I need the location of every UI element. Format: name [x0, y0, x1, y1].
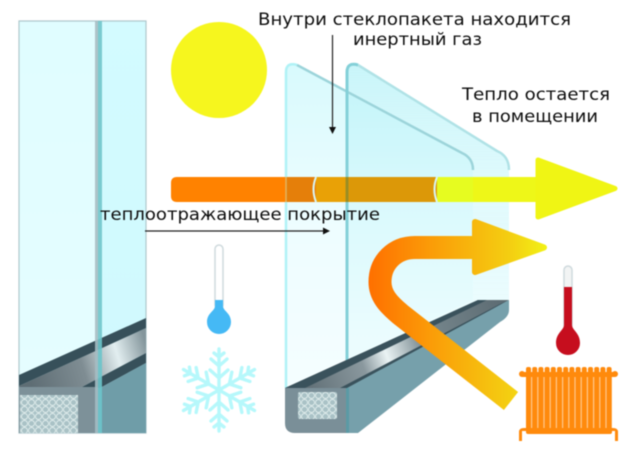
spacer side — [347, 300, 509, 433]
text: coating label: теплоотражающее покрытие — [100, 205, 380, 224]
honeycomb desiccant — [298, 392, 337, 419]
panel: left close-up of glass unit — [19, 21, 146, 433]
icon: cold thermometer — [207, 245, 231, 334]
arrow: reflected heat arrow — [380, 222, 544, 401]
icon: snowflake — [179, 349, 259, 431]
heading: inert gas label — [258, 10, 571, 49]
panel: double glazing unit — [285, 63, 509, 433]
spacer front — [285, 388, 348, 433]
honeycomb desiccant — [20, 395, 78, 433]
arrow: coating pointer — [145, 228, 330, 234]
text: heat stays indoors: в помещении — [472, 107, 598, 126]
icon: radiator — [519, 367, 618, 441]
text: heat stays indoors: Тепло остается — [461, 85, 610, 104]
icon: sun — [171, 22, 267, 118]
heading: inert gas label: инертный газ — [353, 30, 482, 49]
text: heat stays indoors — [461, 85, 610, 126]
heading: inert gas label: Внутри стеклопакета находится — [258, 10, 571, 29]
icon: hot thermometer — [556, 266, 580, 355]
spacer top — [285, 300, 509, 388]
arrow: gas pointer — [329, 35, 336, 134]
arrow: straight heat arrow — [171, 160, 615, 217]
